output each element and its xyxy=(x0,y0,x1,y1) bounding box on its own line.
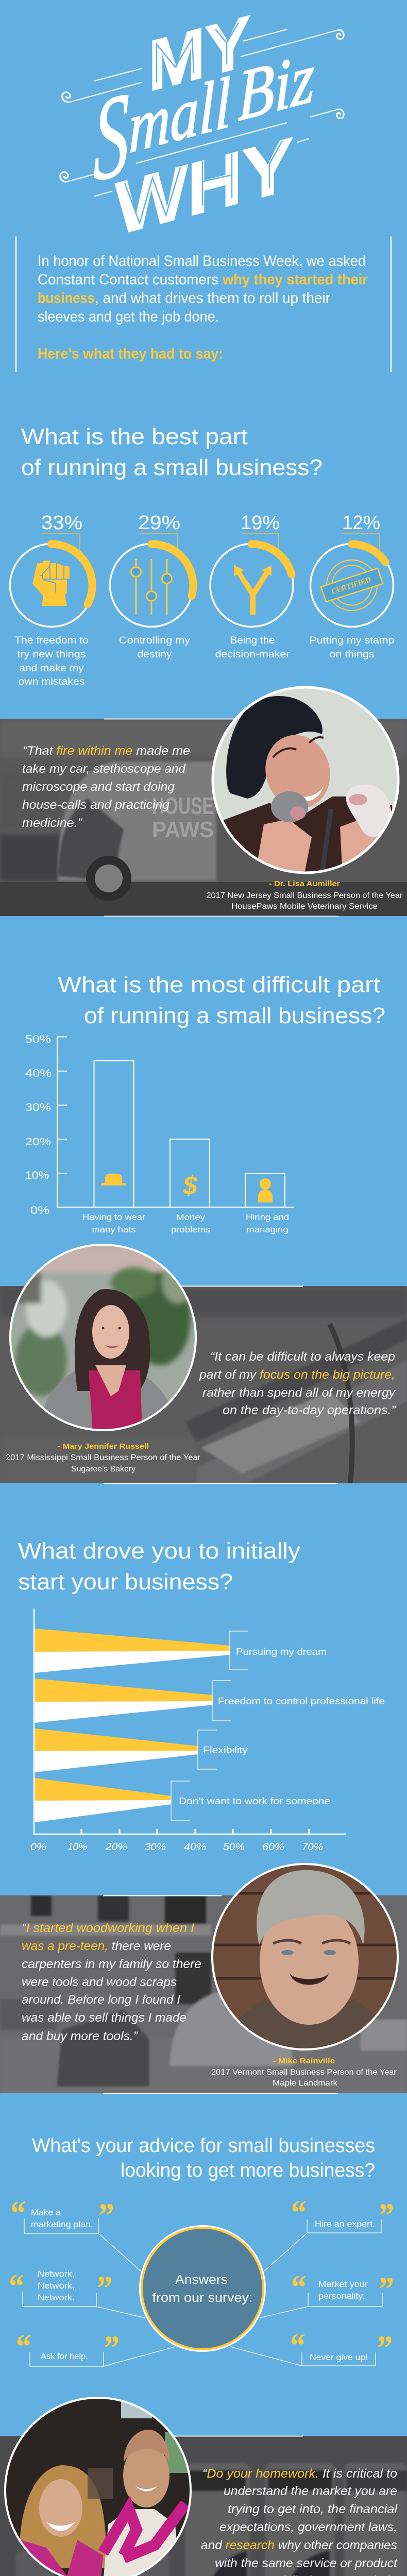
bar chart: most difficult part: managing xyxy=(246,1225,289,1234)
caption xyxy=(211,2057,397,2088)
horizontal bar chart: what drove you: 0% xyxy=(30,1842,46,1853)
intro text block xyxy=(16,236,391,372)
intro text block: , and what drives them to roll up their xyxy=(95,290,330,307)
quote: “I started woodworking when I xyxy=(22,1921,194,1935)
bar chart: most difficult part: Having to wear xyxy=(82,1212,145,1222)
icon: fist xyxy=(32,561,70,606)
quote: microscope and start doing xyxy=(22,780,175,794)
quote: part of my focus on the big picture, xyxy=(199,1368,395,1382)
title word: MY: MY xyxy=(148,1,250,107)
caption: 2017 Vermont Small Business Person of the Year xyxy=(211,2068,397,2077)
callout: never give up: Never give up! xyxy=(310,2352,368,2362)
central circle xyxy=(139,2225,266,2352)
bar chart: most difficult part: 40% xyxy=(25,1067,52,1079)
callout: never give up xyxy=(290,2326,393,2367)
title word: Small Biz: mall xyxy=(129,62,231,168)
panel: testimonial Melanie Oxley and Garrett Marrero xyxy=(0,2398,407,2576)
icon: certified stamp xyxy=(321,560,383,611)
caption: HousePaws Mobile Veterinary Service xyxy=(231,902,378,911)
heading: advice xyxy=(32,2135,375,2181)
bar chart: most difficult part: many hats xyxy=(92,1225,136,1234)
callout: market your personality: ” xyxy=(379,2269,394,2309)
icon: forked arrow xyxy=(234,565,272,615)
quote: expectations, government laws, xyxy=(219,2520,397,2534)
quote xyxy=(201,2467,398,2576)
intro text block: In honor of National Small Business Week, we asked xyxy=(38,253,366,269)
icon: dollar sign: $ xyxy=(182,1171,198,1200)
callout: make a marketing plan: “ xyxy=(10,2193,26,2232)
title word: Small Biz: Biz xyxy=(238,37,314,136)
intro text block: business xyxy=(38,290,95,307)
stat 12%: stamp, certified icon: on things xyxy=(330,649,374,660)
quote: understand the market you are xyxy=(224,2484,397,2498)
bar chart: most difficult part: Hiring and xyxy=(246,1212,289,1222)
panel: testimonial Mary Jennifer Russell xyxy=(0,1245,407,1484)
quote: “It can be difficult to always keep xyxy=(210,1350,395,1364)
section 2: most difficult part xyxy=(25,972,385,1234)
stat 29%: destiny, sliders icon: Controlling my xyxy=(119,635,191,646)
heading: advice: What's your advice for small businesses xyxy=(32,2135,375,2157)
quote: “Do your homework. It is critical to xyxy=(202,2467,397,2481)
icon: certified stamp: CERTIFIED xyxy=(330,575,372,596)
callout: make a marketing plan: marketing plan. xyxy=(31,2219,93,2229)
title word: Small Biz: S xyxy=(93,66,129,207)
diagram: answers from our survey xyxy=(9,2193,394,2367)
quote: carpenters in my family so there xyxy=(22,1957,201,1971)
callout: ask for help xyxy=(16,2327,120,2367)
callout: network: Network. xyxy=(38,2293,75,2302)
heading: what drove you: start your business? xyxy=(18,1569,233,1595)
caption: Sugaree’s Bakery xyxy=(71,1465,135,1473)
callout: network: Network, xyxy=(38,2281,75,2291)
callout: network: ” xyxy=(97,2268,112,2308)
heading: what drove you xyxy=(18,1538,300,1595)
heading: advice: looking to get more business? xyxy=(121,2160,375,2181)
horizontal bar chart: what drove you: Don’t want to work for someone xyxy=(179,1796,330,1806)
portrait: Mike Rainville xyxy=(211,1863,399,2053)
quote: rather than spend all of my energy xyxy=(202,1386,396,1400)
heading: what drove you: What drove you to initially xyxy=(18,1538,300,1564)
horizontal bar chart: what drove you: Flexibility xyxy=(203,1745,248,1755)
icon: person xyxy=(258,1178,273,1202)
heading: most difficult part: of running a small business? xyxy=(84,1003,385,1028)
intro text block: sleeves and get the job done. xyxy=(38,309,219,325)
callout: network: Network, xyxy=(38,2269,75,2279)
quote: house-calls and practicing xyxy=(22,798,170,812)
quote: trying to get into, the financial xyxy=(228,2502,398,2516)
bar chart: most difficult part: problems xyxy=(171,1225,210,1234)
callout: make a marketing plan xyxy=(10,2193,114,2235)
stat 33%: freedom, fist icon: 33% xyxy=(41,512,82,534)
bar chart: most difficult part: 10% xyxy=(25,1170,49,1181)
callout: hire an expert: Hire an expert. xyxy=(315,2219,375,2229)
horizontal bar chart: what drove you: 20% xyxy=(105,1842,127,1853)
stat 33%: freedom, fist icon xyxy=(10,512,93,687)
horizontal bar chart: what drove you: Freedom to control professional life xyxy=(218,1696,385,1706)
stat 29%: destiny, sliders icon: destiny xyxy=(137,649,172,660)
background photo: veterinary van: PAWS xyxy=(152,817,214,842)
callout: ask for help: ” xyxy=(104,2328,120,2367)
central circle: Answers xyxy=(175,2273,228,2287)
quote xyxy=(199,1350,396,1417)
caption: 2017 New Jersey Small Business Person of the Year xyxy=(206,891,403,900)
callout: market your personality: Market your xyxy=(318,2279,368,2289)
heading: best part: of running a small business? xyxy=(21,455,323,480)
stat 12%: stamp, certified icon: 12% xyxy=(342,512,380,534)
stat 33%: freedom, fist icon: and make my xyxy=(20,663,84,674)
quote: medicine.” xyxy=(22,816,82,830)
caption: 2017 Mississippi Small Business Person of the Year xyxy=(6,1453,201,1462)
stat 19%: decision-maker, fork arrow icon xyxy=(210,512,293,660)
caption: - Mary Jennifer Russell xyxy=(58,1442,149,1451)
bar chart: most difficult part: 0% xyxy=(30,1205,49,1216)
horizontal bar chart: what drove you: 70% xyxy=(302,1842,323,1853)
quote: around. Before long I found I xyxy=(22,1993,180,2007)
quote: and buy more tools.” xyxy=(22,2029,138,2043)
heading: most difficult part xyxy=(58,972,385,1028)
heading: best part: What is the best part xyxy=(21,424,248,449)
portrait: Dr. Lisa Aumiller with puppies xyxy=(211,685,402,876)
callout: make a marketing plan: Make a xyxy=(31,2208,61,2217)
quote: on the day-to-day operations.” xyxy=(223,1403,396,1417)
stat 12%: stamp, certified icon: Putting my stamp xyxy=(309,635,395,646)
callout: ask for help: Ask for help. xyxy=(41,2351,88,2361)
horizontal bar chart: what drove you: Pursuing my dream xyxy=(236,1647,327,1657)
caption xyxy=(6,1442,201,1473)
callout: network xyxy=(9,2266,112,2308)
bar chart: most difficult part xyxy=(25,1033,294,1234)
stat 33%: freedom, fist icon: The freedom to xyxy=(14,635,89,646)
callout: ask for help: “ xyxy=(16,2327,31,2366)
stat 33%: freedom, fist icon: try new things xyxy=(18,649,86,660)
caption: - Mike Rainville xyxy=(273,2057,335,2065)
stat 29%: destiny, sliders icon: 29% xyxy=(138,512,180,534)
callout: market your personality xyxy=(291,2267,394,2309)
background photo: veterinary van xyxy=(0,719,407,916)
stat 19%: decision-maker, fork arrow icon: decision-maker xyxy=(215,649,290,660)
horizontal bar chart: what drove you: 40% xyxy=(184,1842,206,1853)
quote: and research why other companies xyxy=(201,2538,397,2552)
callout: hire an expert: “ xyxy=(291,2193,307,2232)
horizontal bar chart: what drove you: 60% xyxy=(262,1842,284,1853)
callout: make a marketing plan: ” xyxy=(98,2196,114,2235)
quote: were tools and wood scraps xyxy=(22,1975,177,1989)
callout: market your personality: personality. xyxy=(318,2291,365,2301)
background photo: bakery case xyxy=(0,1286,407,1483)
portrait: Mary Jennifer Russell xyxy=(10,1245,196,1432)
horizontal bar chart: what drove you: 10% xyxy=(67,1842,87,1853)
intro text block: why they started their xyxy=(222,272,368,288)
section 1: best part xyxy=(10,424,395,687)
stat 29%: destiny, sliders icon xyxy=(110,512,193,660)
portrait: Melanie Oxley and Garrett Marrero xyxy=(5,2398,191,2576)
central circle: from our survey: xyxy=(152,2291,252,2305)
callout: hire an expert: ” xyxy=(379,2196,394,2235)
horizontal bar chart: what drove you xyxy=(30,1608,385,1853)
quote: was able to sell things I made xyxy=(22,2011,186,2025)
title: My Small Biz Why xyxy=(60,1,344,251)
stat 19%: decision-maker, fork arrow icon: Being the xyxy=(230,635,275,646)
section 3: what drove you xyxy=(18,1538,385,1853)
intro text block: Here's what they had to say: xyxy=(38,346,223,362)
background photo: wooden toys xyxy=(0,1895,407,2093)
section 4: advice for small businesses xyxy=(9,2135,394,2367)
quote: was a pre-teen, there were xyxy=(22,1939,171,1953)
title word: Small Biz xyxy=(93,37,314,207)
stat 19%: decision-maker, fork arrow icon: 19% xyxy=(241,512,280,534)
callout: market your personality: “ xyxy=(291,2267,307,2307)
title word: WHY: WHY xyxy=(115,122,293,251)
caption xyxy=(206,879,403,911)
heading: most difficult part: What is the most difficult part xyxy=(58,972,380,997)
background photo: veterinary van: HOUSE xyxy=(152,792,214,819)
background photo: beer cans xyxy=(0,2436,407,2576)
quote xyxy=(22,744,190,830)
horizontal bar chart: what drove you: 50% xyxy=(223,1842,245,1853)
caption: - Dr. Lisa Aumiller xyxy=(269,879,340,888)
panel: testimonial Dr. Lisa Aumiller xyxy=(0,685,407,916)
callout: network: “ xyxy=(9,2266,24,2306)
callout: hire an expert xyxy=(291,2193,394,2235)
callout: never give up: “ xyxy=(290,2326,306,2365)
intro text block: Constant Contact customers xyxy=(38,272,218,288)
caption: Maple Landmark xyxy=(273,2079,338,2088)
icon: sliders xyxy=(131,559,172,615)
bar chart: most difficult part: 50% xyxy=(25,1033,51,1045)
quote xyxy=(22,1921,201,2043)
bar chart: most difficult part: 30% xyxy=(25,1101,51,1113)
quote: with the same service or product xyxy=(215,2556,398,2570)
icon: hat xyxy=(101,1174,126,1185)
panel: testimonial Mike Rainville xyxy=(0,1863,407,2094)
callout: never give up: ” xyxy=(377,2328,393,2367)
heading: best part xyxy=(21,424,323,480)
stat 33%: freedom, fist icon: own mistakes xyxy=(19,676,84,687)
bar chart: most difficult part: 20% xyxy=(25,1136,51,1148)
quote: take my car, stethoscope and xyxy=(22,762,186,776)
bar chart: most difficult part: Money xyxy=(176,1212,206,1222)
quote: “That fire within me made me xyxy=(23,744,190,758)
horizontal bar chart: what drove you: 30% xyxy=(145,1842,166,1853)
stat 12%: stamp, certified icon xyxy=(309,512,395,660)
